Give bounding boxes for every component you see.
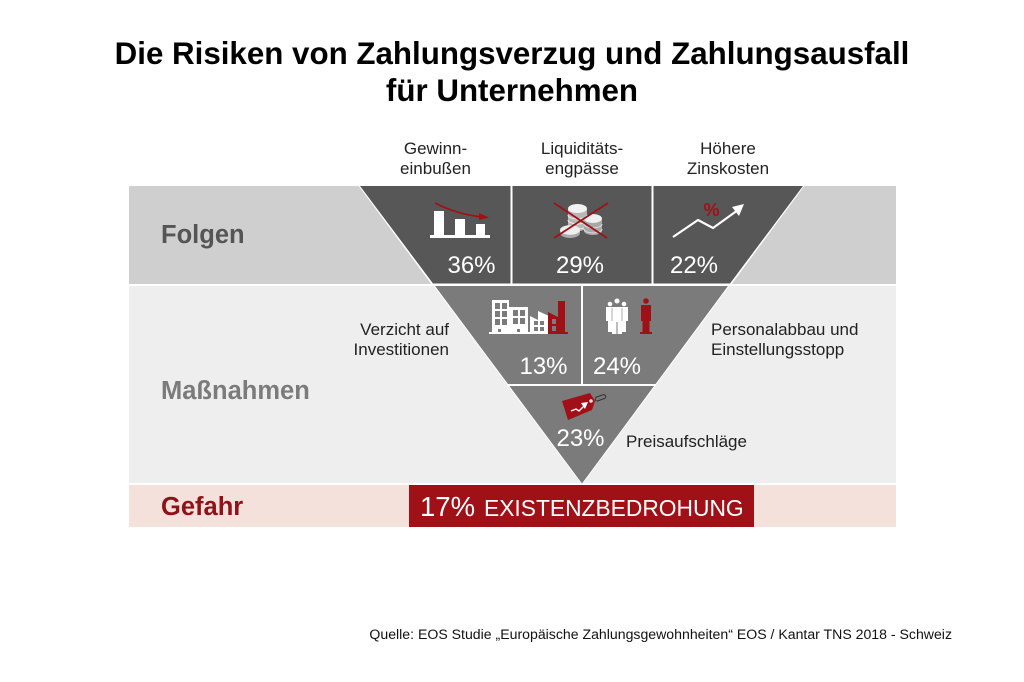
title: für Unternehmen	[386, 73, 638, 108]
icon: falling bar chart	[430, 203, 490, 238]
side labels: Investitionen	[354, 340, 449, 359]
band: Maßnahmen	[129, 286, 896, 483]
percentages: Maßnahmen: 23%	[556, 425, 605, 452]
side labels	[354, 320, 858, 451]
icon: rising arrow with percent: %	[703, 200, 720, 220]
percentages: Maßnahmen: 13%	[519, 353, 568, 380]
column headings: Höhere	[700, 139, 756, 158]
side labels: Verzicht auf	[360, 320, 449, 339]
danger bar: 17%	[420, 491, 475, 522]
funnel middle section: Maßnahmen	[433, 285, 730, 485]
title: Die Risiken von Zahlungsverzug und Zahlungsausfall	[115, 36, 909, 71]
percentages: Folgen: 22%	[670, 252, 718, 279]
column headings: Gewinn-	[404, 139, 467, 158]
title	[115, 36, 909, 108]
icon: price tag	[562, 393, 606, 420]
icon: rising arrow with percent	[673, 200, 744, 237]
percentages: Folgen: 29%	[556, 252, 604, 279]
column headings	[400, 139, 769, 178]
column headings: engpässe	[545, 159, 619, 178]
danger bar: EXISTENZBEDROHUNG	[484, 495, 744, 521]
column headings: Liquiditäts-	[541, 139, 623, 158]
side labels: Preisaufschläge	[626, 432, 747, 451]
band: Folgen: Folgen	[161, 221, 245, 249]
side labels: Personalabbau und	[711, 320, 858, 339]
danger bar	[409, 485, 754, 527]
icon: people group and single red person	[606, 298, 652, 334]
source: Quelle: EOS Studie „Europäische Zahlungsgewohnheiten“ EOS / Kantar TNS 2018 - Schweiz	[369, 626, 952, 642]
percentages: Maßnahmen	[519, 353, 641, 452]
band: Maßnahmen: Maßnahmen	[161, 377, 310, 405]
band: Folgen	[129, 186, 896, 284]
column headings: Zinskosten	[687, 159, 769, 178]
icon: buildings and factory	[489, 300, 568, 334]
band: Gefahr	[129, 485, 896, 527]
percentages: Folgen	[447, 252, 718, 279]
icon: crossed-out coins	[554, 203, 608, 238]
percentages: Folgen: 36%	[447, 252, 496, 279]
percentages: Maßnahmen: 24%	[593, 353, 641, 380]
band: Gefahr: Gefahr	[161, 493, 243, 521]
side labels: Einstellungsstopp	[711, 340, 844, 359]
funnel top section: Folgen	[358, 185, 805, 285]
column headings: einbußen	[400, 159, 471, 178]
